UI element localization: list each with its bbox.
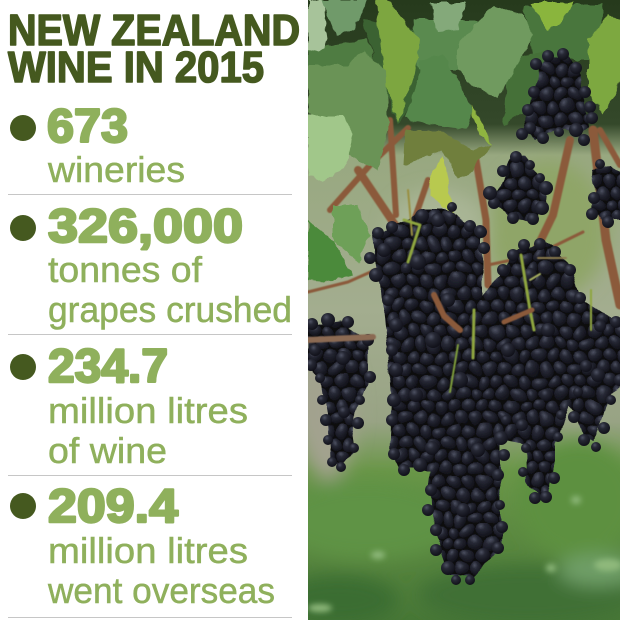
stat: 673 wineries: 673 [47,99,128,152]
stat: 209.4 million litres overseas [10,479,275,611]
stat: 209.4 million litres overseas: went overseas [47,570,275,611]
stat: 234.7 million litres: of wine [48,430,167,471]
stat: 326,000 tonnes [10,199,292,330]
cluster: left [308,320,368,466]
stat: 326,000 tonnes: grapes crushed [48,289,292,330]
stat: 673 wineries: wineries [47,149,185,190]
stems over grapes [308,190,591,392]
cluster: top right [522,55,588,140]
vine leaves [308,0,620,282]
cluster: main mass [374,212,620,578]
grass specks [308,496,620,612]
stat: 209.4 million litres overseas: million litres [48,530,248,571]
photo: wine grapes on the vine [278,0,620,620]
grape clusters [305,48,620,585]
title: WINE IN 2015 [8,43,264,92]
stat: 234.7 million litres [10,339,248,471]
stat: 326,000 tonnes: 326,000 [48,199,243,252]
branches [308,120,620,305]
stat: 326,000 tonnes: tonnes of [48,249,203,290]
grapes: individual berries [305,48,620,585]
stat: 209.4 million litres overseas: 209.4 [48,479,178,532]
cluster: centre [492,156,548,220]
background blur [278,160,620,620]
cluster: right edge [590,166,620,222]
stat: 234.7 million litres: 234.7 [48,339,168,392]
stat: 673 wineries [10,99,185,190]
title: NEW ZEALAND [8,6,300,55]
stat: 234.7 million litres: million litres [48,390,248,431]
title [8,6,300,92]
